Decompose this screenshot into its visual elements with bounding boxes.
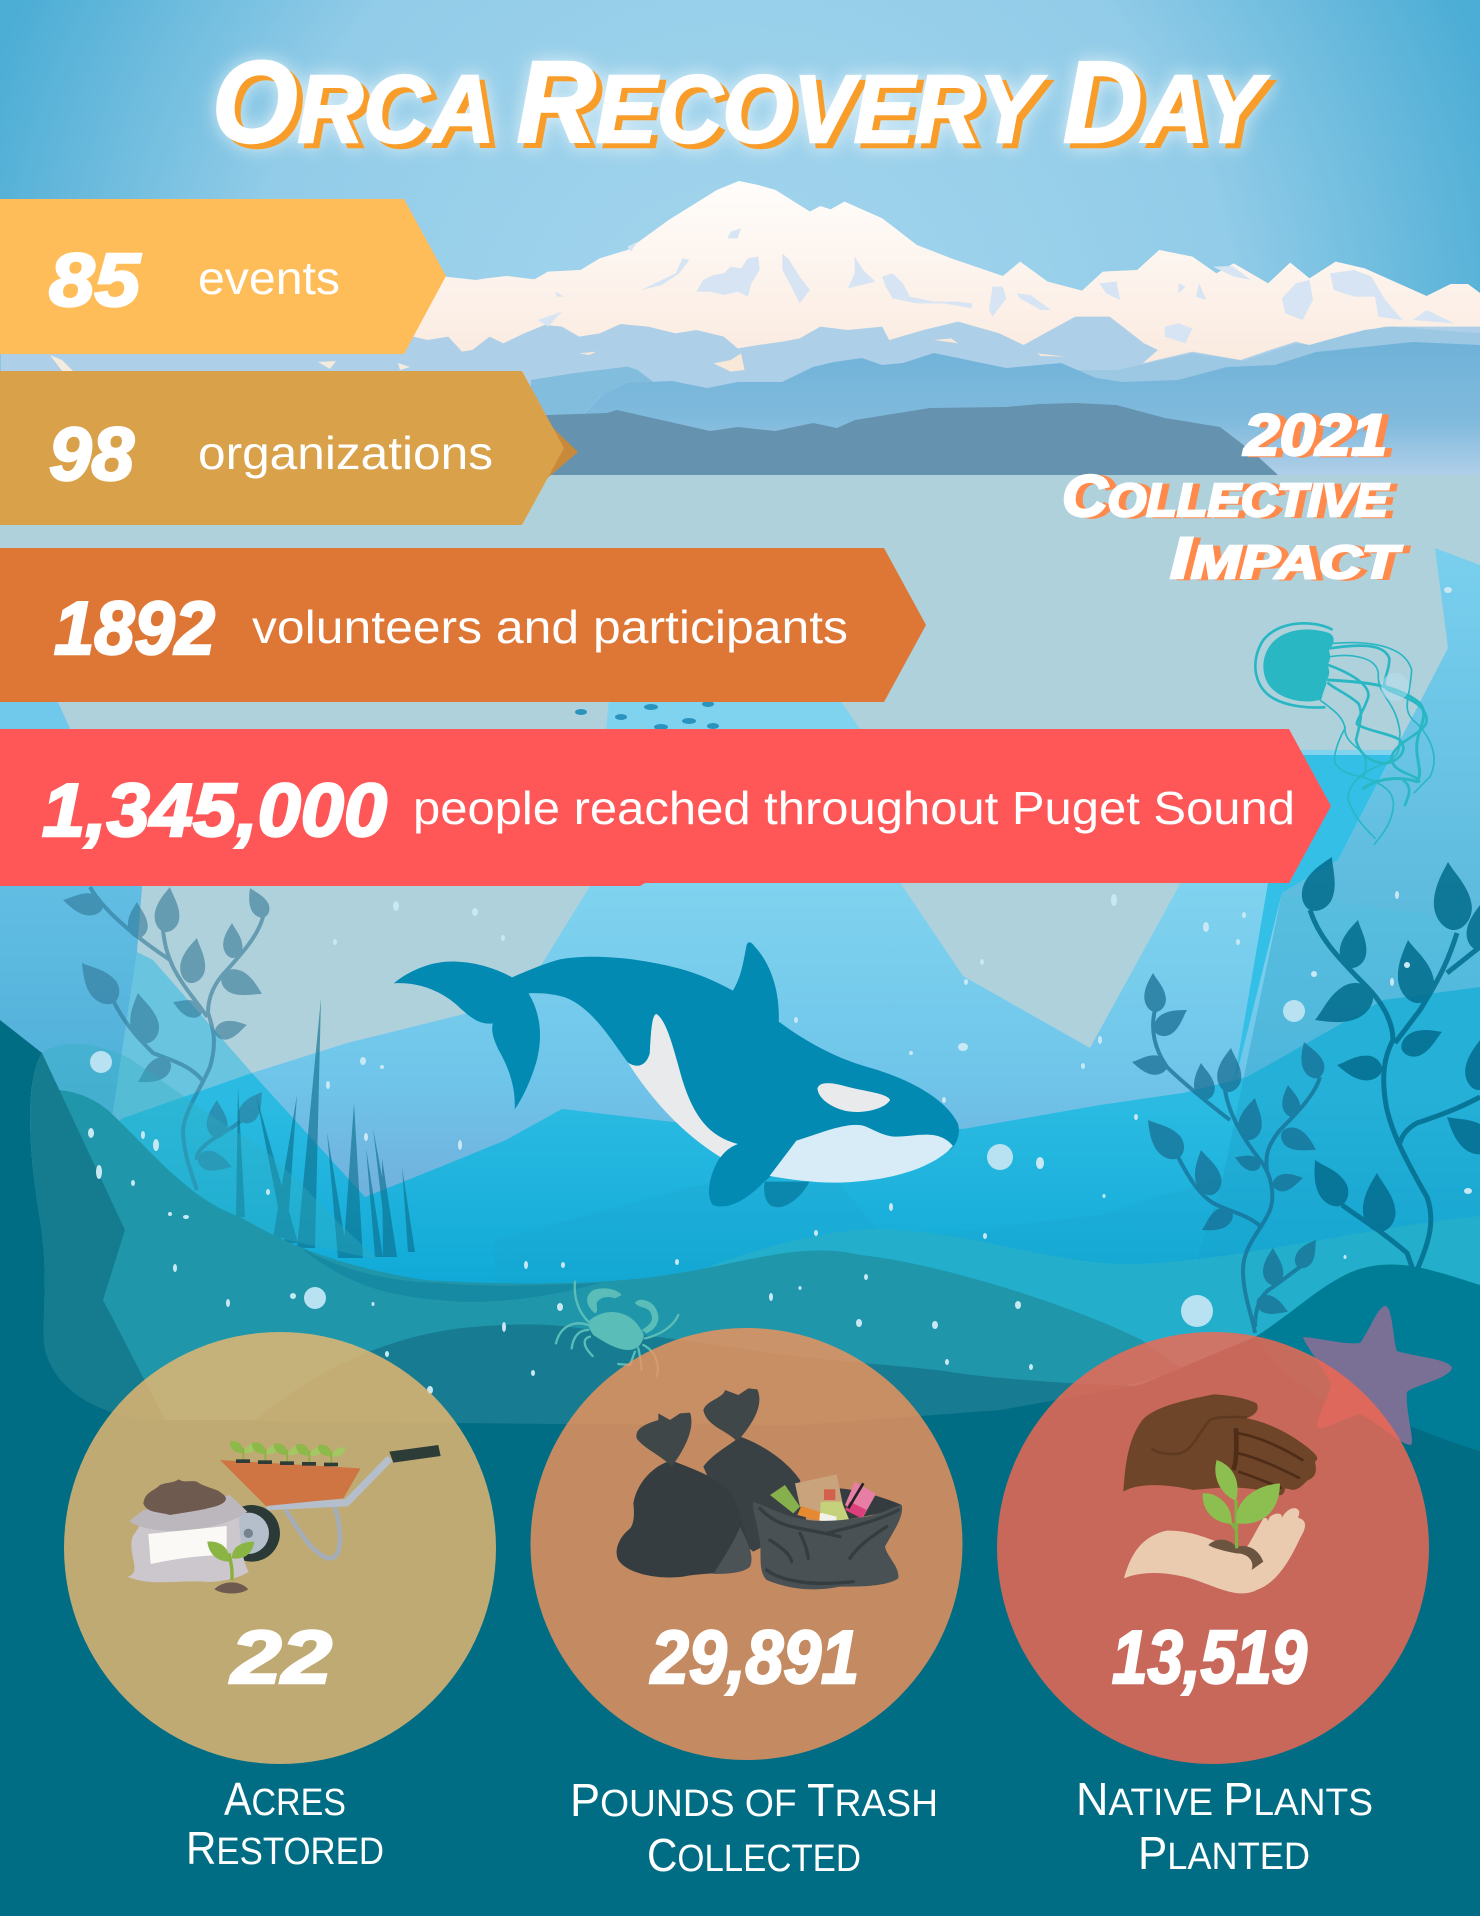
icon: wheelbarrow and soil sack [127,1441,441,1594]
subtitle line 3: IMPACT [1170,526,1403,591]
jellyfish [1255,623,1434,844]
dark island [530,403,1278,476]
circle: native plants [997,1332,1429,1764]
kelp: middle right plant [1131,972,1328,1333]
caption: pounds of trash collected: POUNDS OF TRASH [570,1774,938,1826]
caption: acres restored: RESTORED [186,1822,384,1874]
number: 98: 98 [49,412,134,496]
deep seabed [0,1337,1480,1916]
icon: hands and seedling [1123,1394,1317,1593]
number: 1,345,000: 1,345,000 [42,768,387,852]
starfish [1303,1306,1452,1445]
caption: native plants planted: NATIVE PLANTS [1076,1773,1373,1825]
sound water surface [0,475,1480,1305]
crab [556,1282,678,1376]
sky background [0,0,1480,480]
far pale mountain base [0,181,1480,423]
caption: native plants planted: PLANTED [1138,1827,1310,1879]
back left ridge [531,367,655,415]
orca eye patch [817,1083,890,1112]
icon: trash bags [617,1388,902,1589]
number: 13,519: 13,519 [1112,1615,1307,1699]
right dark hill [1255,1265,1480,1451]
bubbles [90,673,1409,1327]
caption: acres restored [186,1773,384,1874]
right blue column [1282,548,1480,925]
left rock overlay [30,1053,165,1420]
particles [88,587,1472,1394]
bright cyan strip [1232,755,1392,1093]
inner dark hill [250,1324,1133,1425]
kelp: large right plant [1296,851,1480,1270]
circle: acres restored [64,1332,496,1764]
stat numbers in circles [229,1615,1307,1699]
circle: pounds of trash [530,1328,962,1760]
fish school [575,701,719,730]
banner 1: events [0,199,446,354]
crab body [589,1312,644,1350]
translucent left slope [42,1044,380,1260]
left lighter wedge [113,952,252,1118]
label: organizations: organizations [198,427,493,479]
caption: pounds of trash collected [570,1774,938,1881]
subtitle line 2: COLLECTIVE [1062,464,1389,529]
subtitle line 1: 2021 [1243,403,1387,468]
subtitle: 2021 collective impact [1062,403,1403,591]
orca belly [770,1125,953,1183]
darker right overlay [1183,893,1480,1300]
label: people reached throughout Puget Sound: people reached throughout Puget Sound [413,782,1295,834]
teal hill [58,1090,1200,1420]
central blue water [0,700,1480,1300]
main blue ridge [583,342,1480,478]
mountain range [0,181,1480,478]
snow shadow patches [538,228,1454,343]
deep blue water [0,987,1480,1310]
number: 22: 22 [229,1615,332,1699]
caption: pounds of trash collected: COLLECTED [647,1829,861,1881]
back wave [700,1216,1480,1500]
orca body [394,942,959,1207]
left rock [0,1020,110,1430]
banner 2: organizations [0,371,578,525]
number: 85: 85 [49,238,141,322]
seagrass [236,998,415,1258]
snow cap [359,181,1480,363]
orca white flank [628,1014,738,1157]
caption: native plants planted [1076,1773,1373,1879]
exposed rock spots [579,338,1065,372]
number: 29,891: 29,891 [649,1615,859,1699]
hill shadow band [300,1247,600,1302]
orca [394,942,959,1207]
jellyfish bell [1263,630,1334,701]
orca second flipper [764,1182,809,1207]
caption: acres restored: ACRES [224,1773,346,1825]
label: volunteers and participants: volunteers and participants [252,601,848,653]
overlay on deep water [495,1177,1223,1290]
small rock bits behind banners [50,355,410,371]
banner 3: volunteers [0,548,926,702]
number: 1892: 1892 [54,586,215,670]
underwater light shapes [0,548,1480,1310]
kelp: left plant [61,884,273,1190]
label: events: events [198,252,340,304]
banner 4: people reached [0,729,1331,886]
title: ORCA RECOVERY DAY [212,37,1270,167]
left blue column [0,700,142,1113]
light far ridge right [1079,327,1480,403]
